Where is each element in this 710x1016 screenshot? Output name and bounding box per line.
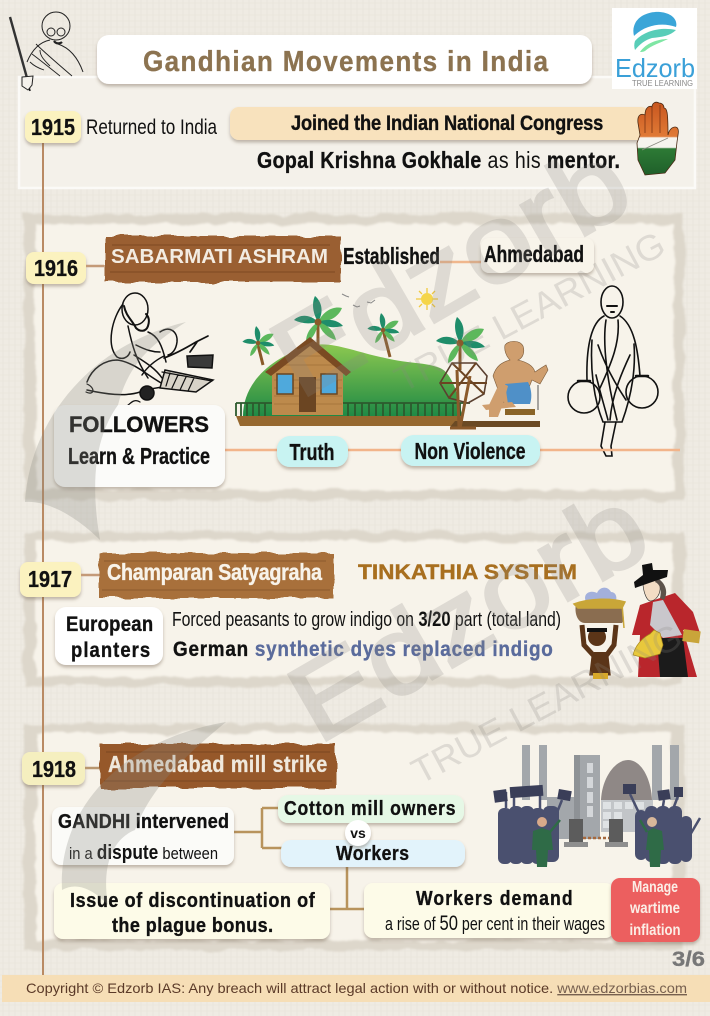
timeline line	[42, 143, 44, 975]
logo: Edzorb: TRUE LEARNING	[632, 79, 693, 88]
pill: Non Violence	[401, 435, 540, 466]
box: followers: FOLLOWERS	[69, 412, 209, 437]
box: followers	[54, 405, 225, 487]
logo: Edzorb: Edzorb	[615, 53, 695, 83]
box: Gandhi intervened: GANDHI intervened	[58, 811, 229, 833]
box: followers: Learn & Practice	[68, 443, 210, 469]
illustration: mill strike	[493, 745, 700, 867]
box: European planters: European	[66, 613, 153, 636]
box: Workers: Workers	[336, 842, 409, 864]
box: Workers	[281, 840, 465, 867]
text: established: Established	[343, 243, 440, 269]
pill: Non Violence: Non Violence	[414, 438, 526, 464]
panel: 1916	[24, 214, 684, 500]
heading: Tinkathia system: TINKATHIA SYSTEM	[358, 561, 577, 584]
box: manage wartime inflation: Manage	[632, 879, 678, 896]
panel: 1918	[24, 724, 684, 950]
watermark: Edzorb text upper: TRUE LEARNING	[388, 223, 672, 400]
box: European planters: planters	[71, 639, 150, 662]
box: Ahmedabad	[481, 238, 594, 273]
box: plague bonus issue	[54, 883, 330, 939]
footer	[2, 975, 710, 1002]
year badge 1915: 1915	[31, 114, 75, 140]
logo: Edzorb	[612, 8, 697, 89]
box: European planters	[55, 607, 163, 665]
connector line 1916	[225, 449, 680, 451]
watermark: Edzorb text upper: Edzorb	[250, 119, 650, 421]
text: forced peasants: Forced peasants to grow indigo on 3/20 part (total land)	[172, 608, 561, 631]
illustration: Gandhi carrying pots	[568, 286, 658, 456]
wood sign: Ahmedabad mill strike: Ahmedabad mill strike	[108, 752, 327, 777]
box: workers demand: Workers demand	[416, 887, 573, 909]
text: Gokhale mentor: Gopal Krishna Gokhale as his mentor.	[257, 148, 620, 173]
year badge 1917	[20, 562, 81, 597]
box: manage wartime inflation	[611, 878, 700, 942]
wood sign: Champaran Satyagraha: Champaran Satyagraha	[107, 560, 323, 585]
illustration: Gandhi spinning sketch	[86, 293, 213, 405]
wood sign: Champaran Satyagraha	[99, 553, 333, 598]
year badge 1916	[26, 252, 86, 284]
box: workers demand	[364, 883, 614, 938]
title banner: Gandhian Movements in India	[143, 45, 549, 77]
illustration: colonial planter	[632, 563, 701, 677]
banner: joined INC	[230, 107, 650, 140]
text: German synthetic dyes: German synthetic dyes replaced indigo	[173, 638, 553, 661]
connectors 1918	[234, 808, 365, 909]
text: returned to India: Returned to India	[86, 116, 217, 139]
panel: 1915 frame	[19, 77, 695, 188]
box: manage wartime inflation: wartime	[629, 900, 680, 917]
box: plague bonus issue: the plague bonus.	[112, 915, 273, 937]
box: Gandhi intervened	[52, 807, 234, 865]
illustration: ashram hut and hill	[236, 296, 485, 426]
footer: Copyright © Edzorb IAS: Any breach will attract legal action with or without notice. www.edzorbias.com	[26, 980, 687, 996]
watermark: Edzorb text lower: Edzorb	[268, 464, 668, 766]
icon: congress hand	[637, 102, 678, 175]
wood sign: Ahmedabad mill strike	[100, 744, 336, 788]
wood sign: Sabarmati Ashram: SABARMATI ASHRAM	[111, 246, 328, 268]
watermark: swoosh shapes	[25, 322, 226, 905]
box: manage wartime inflation: inflation	[630, 922, 680, 939]
illustration: Gandhi at charkha	[440, 341, 548, 428]
year badge 1918	[22, 752, 85, 785]
pill: Truth: Truth	[290, 439, 334, 465]
title banner	[97, 35, 592, 84]
year badge 1916: 1916	[34, 255, 78, 281]
page number: 3/6	[672, 948, 705, 971]
year badge 1917: 1917	[28, 566, 72, 592]
box: Ahmedabad: Ahmedabad	[484, 241, 584, 267]
icon: Gandhi with stick	[10, 12, 83, 91]
box: workers demand: a rise of 50 per cent in their wages	[385, 912, 605, 935]
box: plague bonus issue: Issue of discontinuation of	[70, 890, 315, 912]
banner: joined INC: Joined the Indian National Congress	[291, 112, 603, 135]
badge: vs	[345, 820, 371, 846]
illustration: peasant with basket	[574, 588, 625, 679]
panel: 1917	[24, 532, 684, 686]
pill: Truth	[277, 436, 348, 467]
badge: vs: vs	[350, 825, 366, 841]
wood sign: Sabarmati Ashram	[105, 236, 341, 282]
illustration: sun and birds	[342, 288, 438, 310]
year badge 1918: 1918	[32, 756, 76, 782]
box: Cotton mill owners: Cotton mill owners	[284, 797, 456, 819]
watermark: Edzorb text lower: TRUE LEARNING	[405, 615, 689, 792]
box: Gandhi intervened: in a dispute between	[69, 842, 218, 864]
